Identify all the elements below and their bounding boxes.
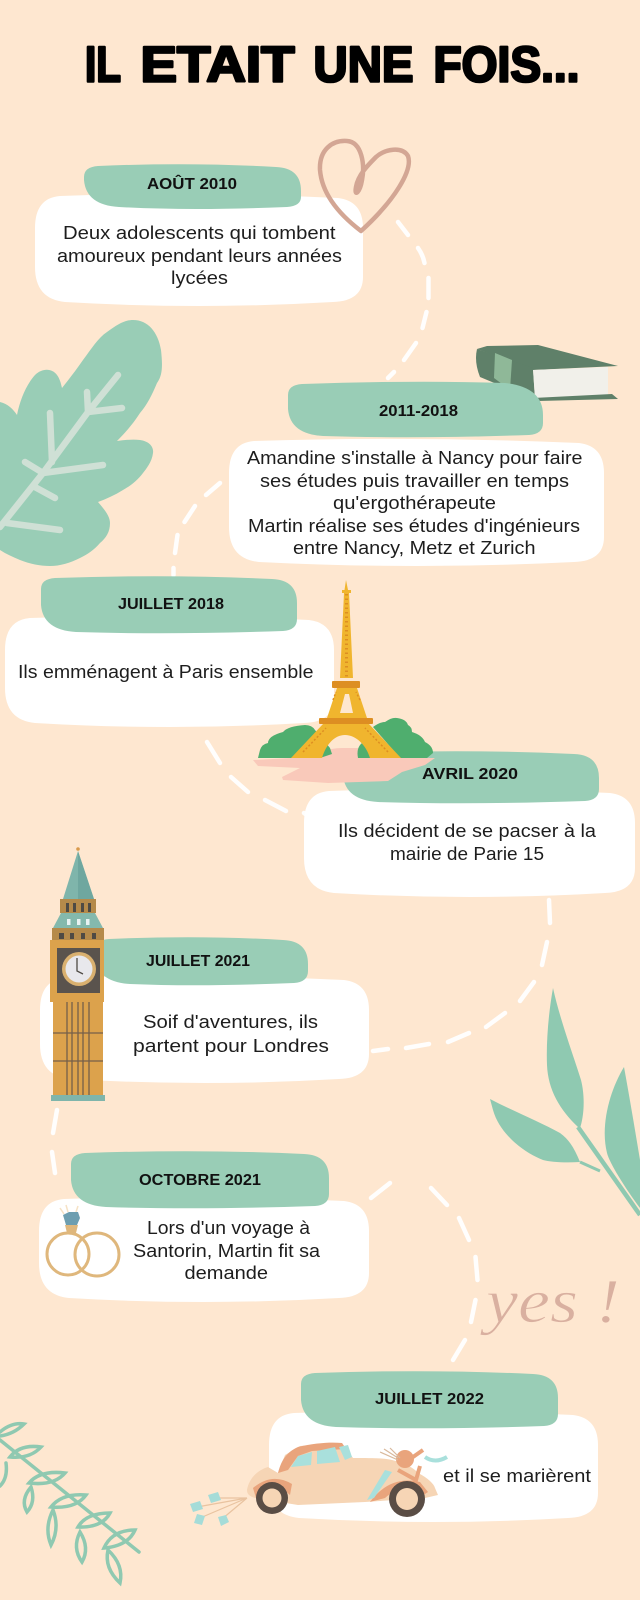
- description: lycées: [171, 267, 228, 288]
- icon: wedding car: [190, 1443, 447, 1526]
- date tab: [343, 751, 599, 803]
- description: [57, 222, 342, 288]
- title: UNE: [314, 36, 414, 92]
- icon: wedding rings: [47, 1205, 119, 1276]
- icon: heart: [320, 141, 409, 231]
- date: AOÛT 2010: [147, 175, 237, 193]
- date: AVRIL 2020: [422, 766, 518, 783]
- description: Martin réalise ses études d'ingénieurs: [248, 515, 580, 536]
- handwritten yes: yes !: [479, 1268, 620, 1336]
- date tab: [41, 576, 297, 633]
- description: ses études puis travailler en temps: [260, 470, 569, 491]
- description: entre Nancy, Metz et Zurich: [293, 537, 536, 558]
- card: [5, 616, 334, 727]
- panel: juillet 2018: [5, 576, 334, 727]
- description: [133, 1011, 329, 1056]
- date tab: [95, 937, 308, 985]
- date: JUILLET 2021: [146, 953, 250, 970]
- description: amoureux pendant leurs années: [57, 245, 342, 266]
- panel: juillet 2021: [40, 937, 369, 1083]
- title: ETAIT: [140, 36, 294, 92]
- date tab: [84, 164, 301, 209]
- date: 2011-2018: [379, 403, 458, 420]
- decorative leaf branch: [490, 988, 640, 1215]
- description: [247, 447, 582, 558]
- date tab: [301, 1371, 558, 1428]
- title: FOIS...: [434, 36, 580, 92]
- description: Santorin, Martin fit sa: [133, 1240, 321, 1261]
- date: JUILLET 2022: [375, 1391, 484, 1408]
- description: Lors d'un voyage à: [147, 1217, 311, 1238]
- description: Ils décident de se pacser à la: [338, 820, 597, 841]
- description: Amandine s'installe à Nancy pour faire: [247, 447, 582, 468]
- description: mairie de Parie 15: [390, 843, 544, 864]
- card: [35, 194, 363, 306]
- card: [229, 439, 604, 566]
- decorative sprig: [0, 1424, 139, 1583]
- description: Ils emménagent à Paris ensemble: [18, 661, 314, 682]
- icon: book: [476, 345, 618, 401]
- title: IL: [85, 36, 121, 92]
- panel: avril 2020: [304, 751, 635, 897]
- card: [39, 1197, 369, 1302]
- icon: big ben: [50, 847, 105, 1101]
- date: JUILLET 2018: [118, 596, 224, 613]
- panel: 2011-2018: [229, 382, 604, 566]
- description: Deux adolescents qui tombent: [63, 222, 336, 243]
- description: qu'ergothérapeute: [333, 492, 496, 513]
- card: [304, 789, 635, 897]
- description: [133, 1217, 321, 1283]
- date tab: [71, 1151, 329, 1208]
- dashed path connecting the events: [52, 222, 550, 1360]
- description: demande: [184, 1262, 268, 1283]
- date tab: [288, 382, 543, 437]
- date: OCTOBRE 2021: [139, 1172, 261, 1189]
- icon: eiffel tower: [253, 580, 435, 783]
- card: [40, 976, 369, 1083]
- description: Soif d'aventures, ils: [143, 1011, 318, 1032]
- panel: octobre 2021: [39, 1151, 369, 1302]
- title: [85, 36, 580, 92]
- panel: juillet 2022: [269, 1371, 598, 1522]
- panel: août 2010: [35, 164, 363, 306]
- description: partent pour Londres: [133, 1035, 329, 1056]
- description: et il se marièrent: [443, 1465, 591, 1486]
- description: [338, 820, 597, 864]
- decorative large leaf: [0, 320, 162, 566]
- card: [269, 1411, 598, 1522]
